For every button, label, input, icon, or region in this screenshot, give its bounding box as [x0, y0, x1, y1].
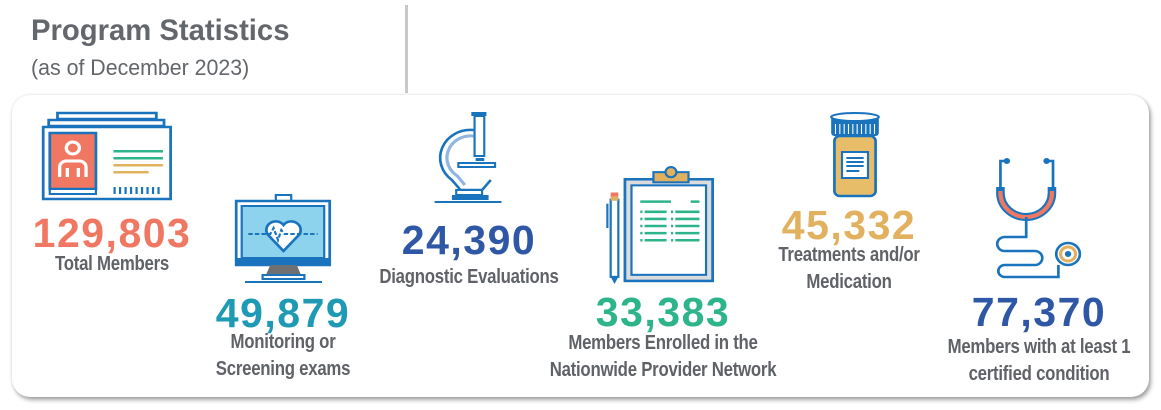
icon: clipboard — [606, 166, 714, 284]
text: 129,803 — [33, 210, 191, 256]
icon: ID card — [42, 112, 172, 200]
text: 77,370 — [972, 289, 1106, 335]
stat: diagnostic — [379, 217, 559, 288]
stat: treatments — [778, 202, 920, 293]
stat: enrolled — [550, 289, 776, 381]
text: 24,390 — [402, 217, 536, 263]
icon: microscope — [434, 112, 502, 203]
stat: certified — [948, 289, 1130, 385]
text: Members Enrolled in the — [568, 332, 758, 354]
icon: stethoscope — [996, 158, 1082, 278]
text: 45,332 — [782, 202, 916, 248]
text: Treatments and/or — [778, 244, 920, 266]
text: Screening exams — [216, 358, 350, 380]
stat: monitoring — [216, 290, 350, 380]
panel: stats card — [12, 95, 1149, 397]
stat: total members — [33, 210, 191, 275]
text: Members with at least 1 — [948, 336, 1130, 358]
text: 33,383 — [596, 289, 730, 335]
title: Program Statistics — [31, 14, 289, 47]
text: certified condition — [969, 363, 1109, 385]
text: Total Members — [55, 253, 169, 275]
text: Diagnostic Evaluations — [379, 266, 559, 288]
text: 49,879 — [216, 290, 350, 336]
text: Nationwide Provider Network — [550, 359, 776, 381]
text: Monitoring or — [231, 331, 335, 353]
text: Medication — [806, 271, 892, 293]
subtitle: (as of December 2023) — [31, 55, 249, 80]
icon: monitor — [234, 194, 332, 283]
icon: pill bottle — [830, 112, 880, 198]
